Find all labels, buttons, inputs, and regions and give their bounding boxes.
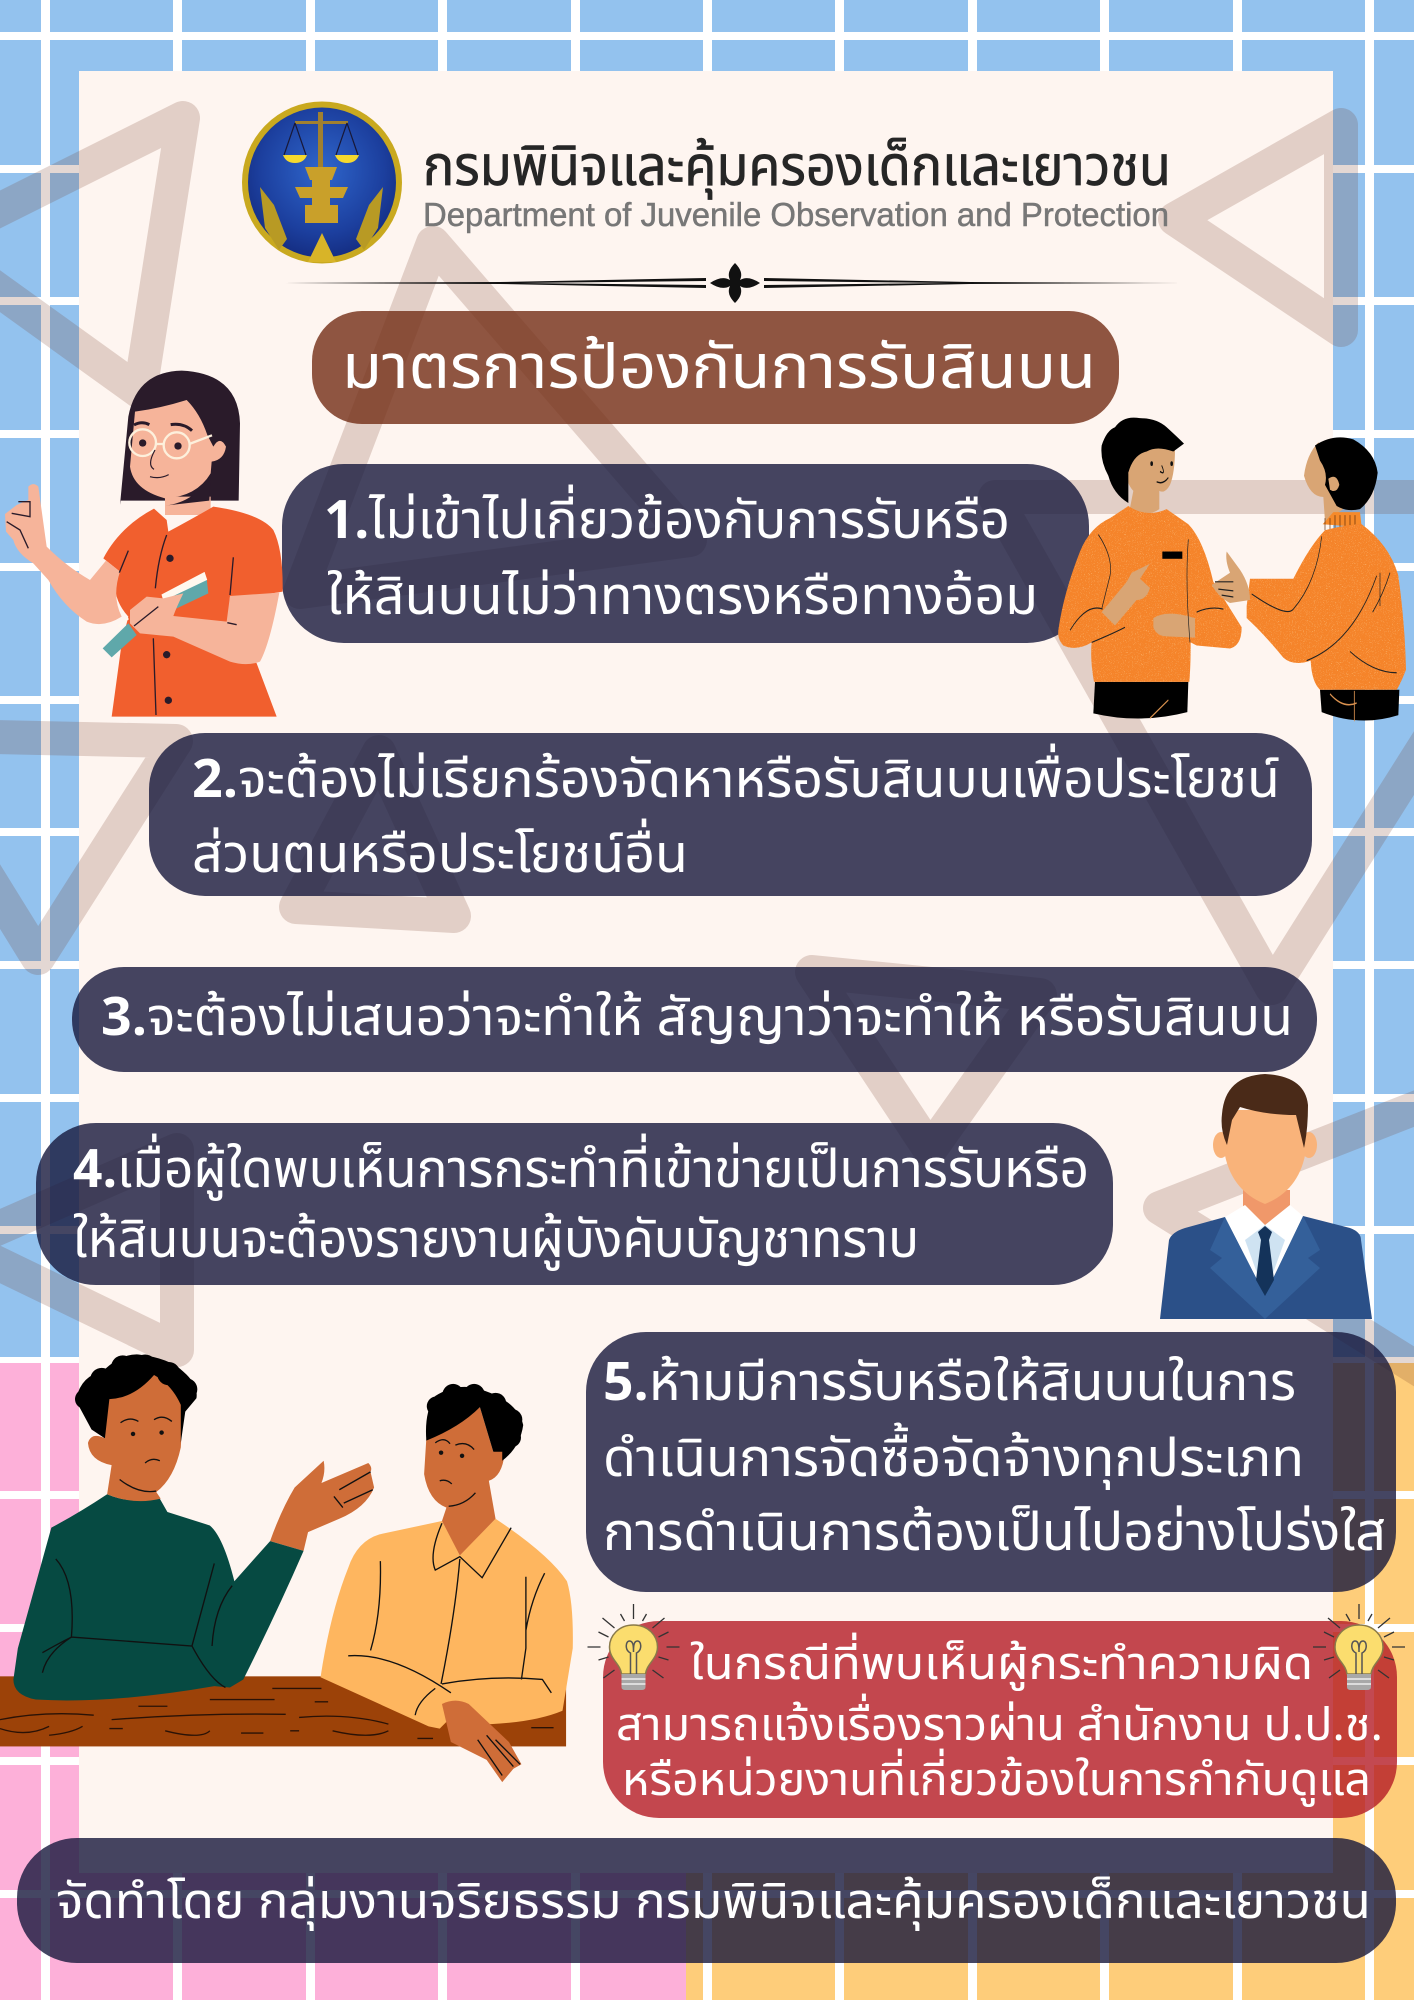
icon: light bulb left [588, 1604, 680, 1690]
title pill: มาตรการป้องกันการรับสินบน [342, 322, 1096, 416]
measure 5 pill: การดำเนินการต้องเป็นไปอย่างโปร่งใส [603, 1494, 1386, 1574]
decorative triangle outlines [0, 118, 1414, 1420]
measure 5 pill: 5.ห้ามมีการรับหรือให้สินบนในการ [603, 1344, 1296, 1424]
ornamental divider [285, 263, 1181, 303]
illustration: two men in orange talking [1058, 418, 1406, 721]
measure 4 pill: ให้สินบนจะต้องรายงานผู้บังคับบัญชาทราบ [73, 1201, 919, 1281]
measure 2 pill: 2.จะต้องไม่เรียกร้องจัดหาหรือรับสินบนเพื่อประโยชน์ [192, 741, 1280, 821]
measure 1 pill [282, 464, 1089, 643]
red callout: how to report: สามารถแจ้งเรื่องราวผ่าน สำนักงาน ป.ป.ช. [616, 1691, 1383, 1761]
red callout: how to report: หรือหน่วยงานที่เกี่ยวข้องในการกำกับดูแล [622, 1746, 1371, 1816]
measure 3 pill: 3.จะต้องไม่เสนอว่าจะทำให้ สัญญาว่าจะทำให้ หรือรับสินบน [101, 979, 1293, 1059]
illustration: two men at a wooden table [0, 1354, 573, 1782]
illustration: woman with glasses holding a book [5, 371, 283, 717]
footer pill: credit [17, 1838, 1396, 1963]
measure 2 pill [149, 733, 1312, 896]
red callout: how to report: ในกรณีที่พบเห็นผู้กระทำความผิด [690, 1630, 1313, 1700]
illustration: man in blue suit [1160, 1074, 1372, 1319]
red callout: how to report [603, 1621, 1397, 1818]
measure 4 pill: 4.เมื่อผู้ใดพบเห็นการกระทำที่เข้าข่ายเป็นการรับหรือ [73, 1131, 1089, 1211]
measure 4 pill [36, 1123, 1113, 1285]
logo: department seal [242, 102, 402, 264]
measure 1 pill: 1.ไม่เข้าไปเกี่ยวข้องกับการรับหรือ [324, 482, 1010, 562]
measure 5 pill: ดำเนินการจัดซื้อจัดจ้างทุกประเภท [603, 1420, 1304, 1500]
measure 5 pill [586, 1332, 1396, 1592]
footer pill: credit: จัดทำโดย กลุ่มงานจริยธรรม กรมพินิจและคุ้มครองเด็กและเยาวชน [56, 1867, 1371, 1941]
measure 2 pill: ส่วนตนหรือประโยชน์อื่น [192, 816, 688, 896]
icon: light bulb right [1313, 1604, 1405, 1690]
man in green sweater [13, 1354, 374, 1700]
measure 1 pill: ให้สินบนไม่ว่าทางตรงหรือทางอ้อม [327, 558, 1038, 638]
header text: department name: กรมพินิจและคุ้มครองเด็กและเยาวชน [423, 127, 1171, 210]
wooden table [0, 1676, 566, 1746]
cream content panel [79, 71, 1333, 1873]
header text: department name: Department of Juvenile Observation and Protection [423, 196, 1169, 233]
man in orange, right [1247, 437, 1406, 721]
man in yellow shirt [321, 1384, 573, 1782]
man in orange, left [1058, 418, 1250, 719]
